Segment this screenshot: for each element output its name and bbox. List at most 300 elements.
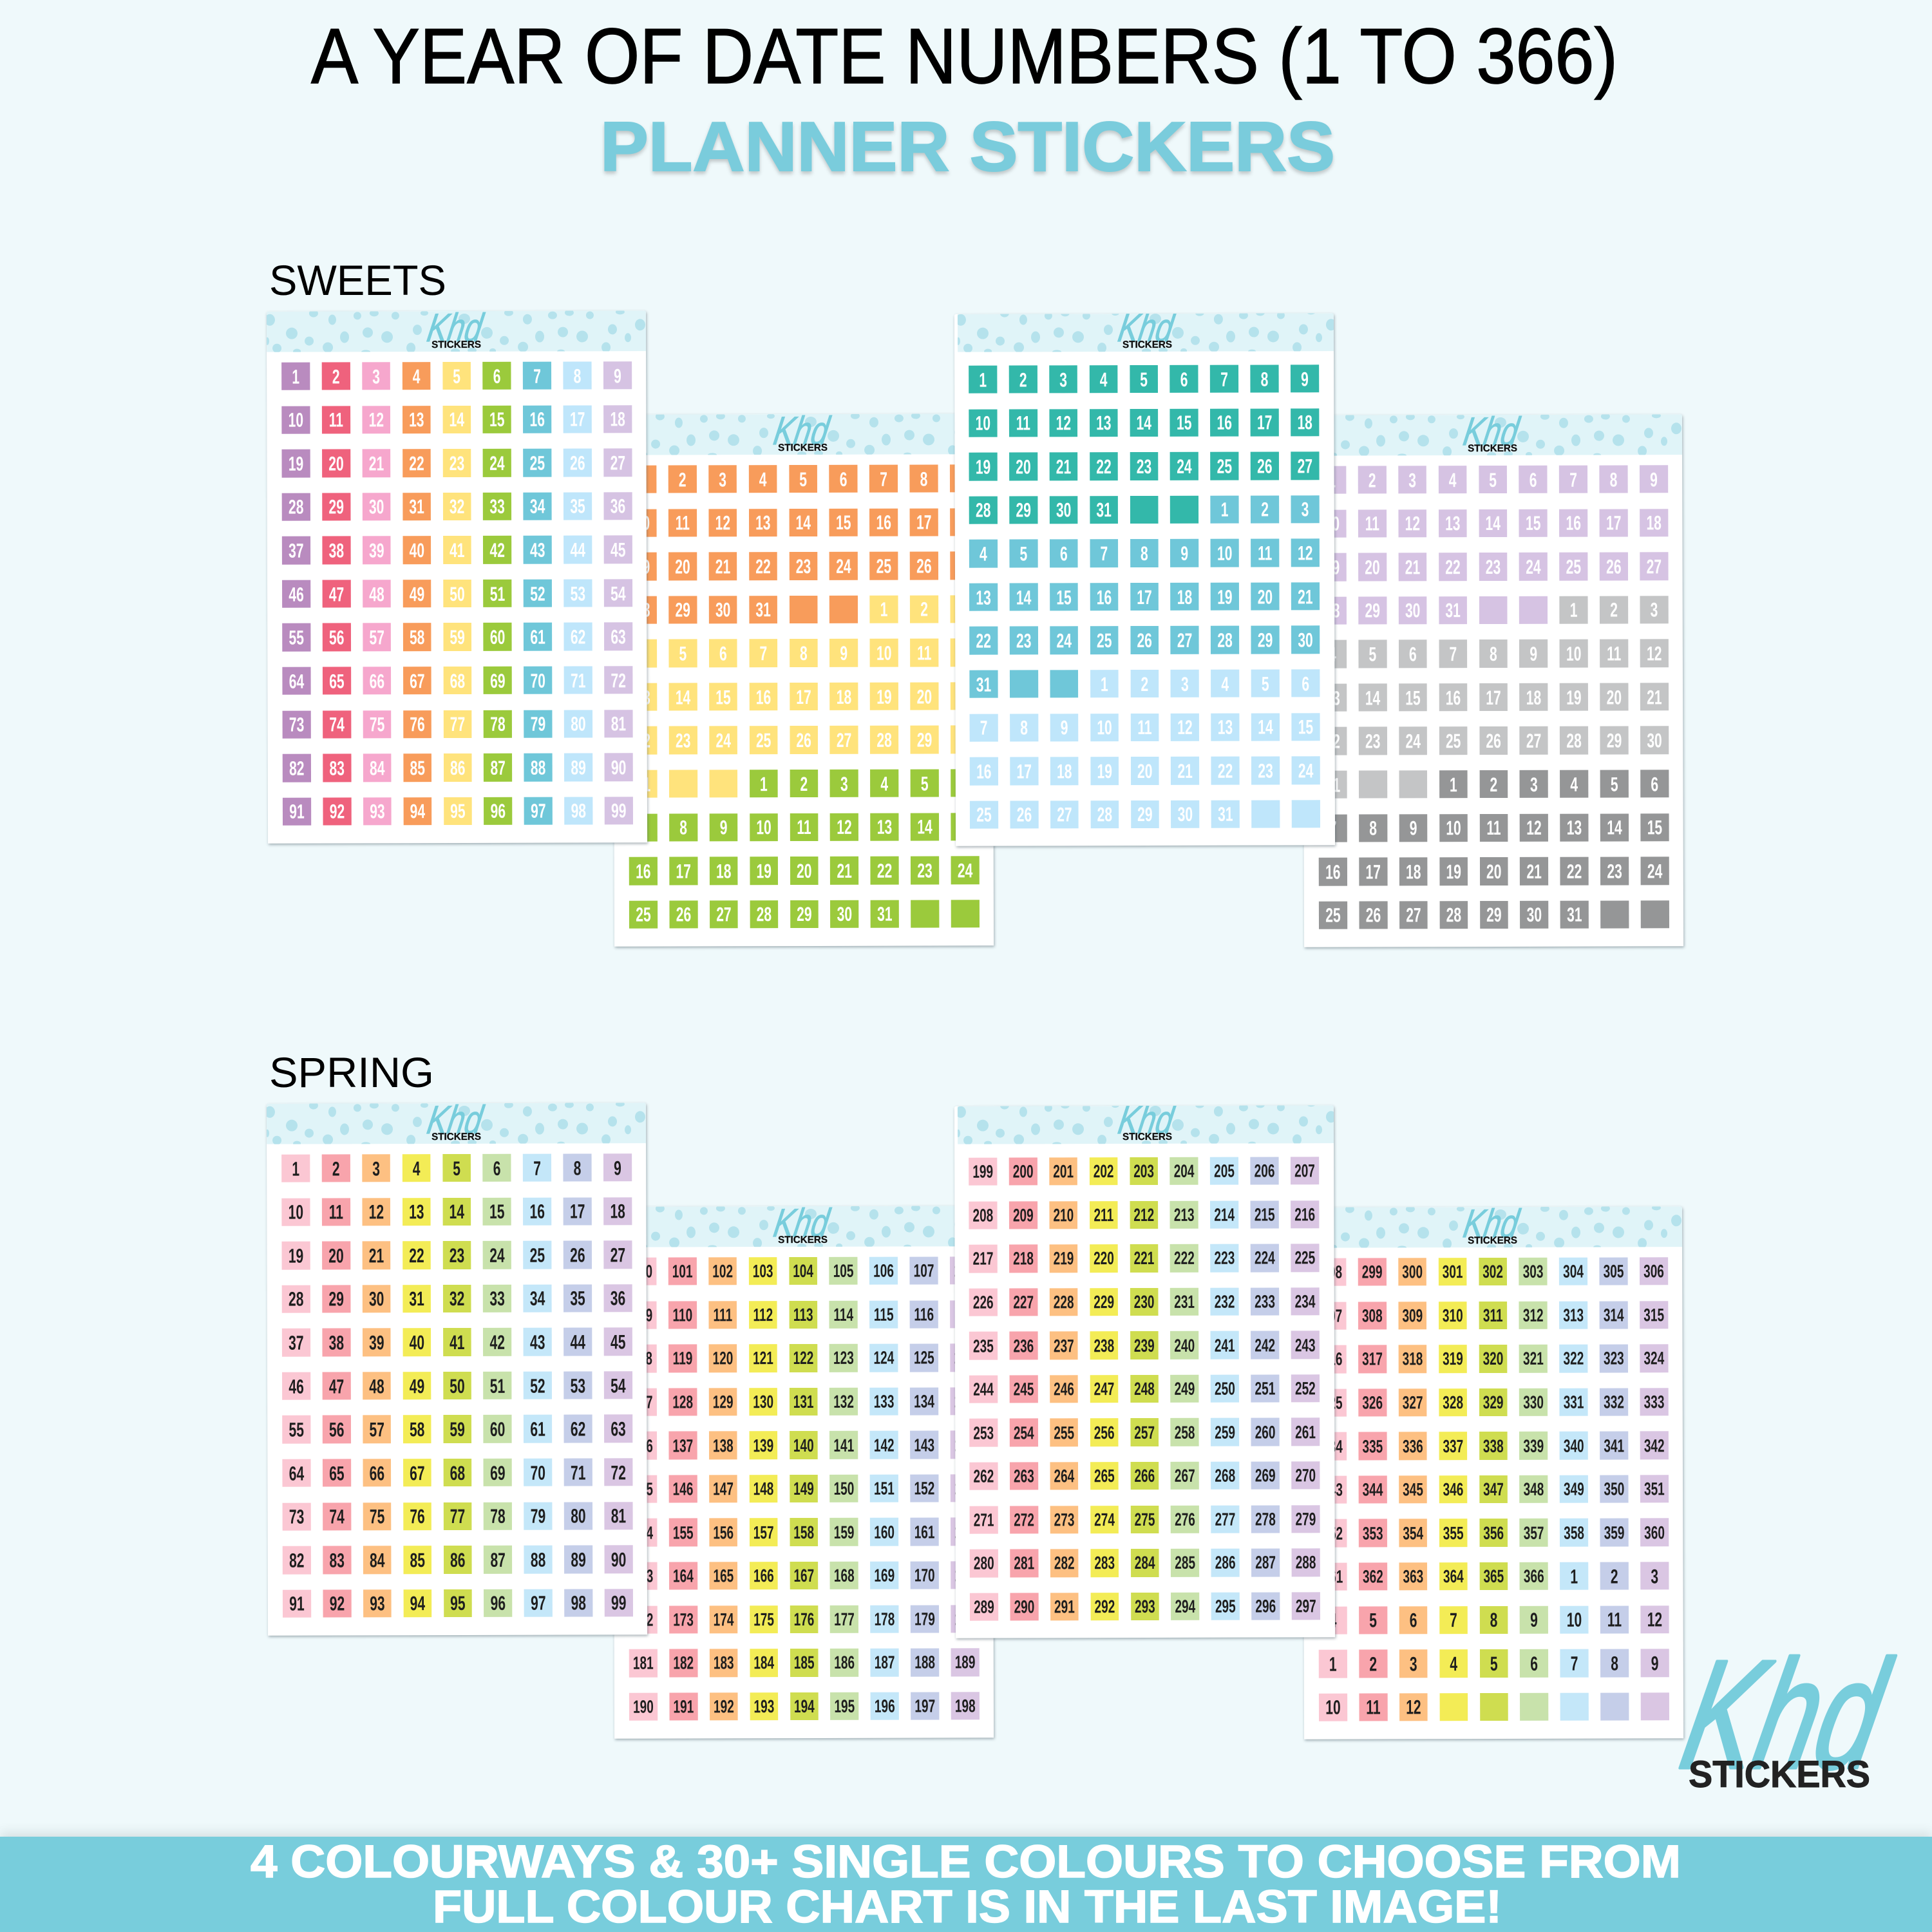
sticker grid: 258 <box>1175 1422 1195 1443</box>
sticker grid: 22 <box>409 452 424 475</box>
sticker grid: 190 <box>633 1697 654 1717</box>
sticker grid: 39 <box>369 1331 384 1354</box>
sticker grid: 13 <box>409 408 424 431</box>
sticker grid: 65 <box>329 670 345 692</box>
sticker grid: 56 <box>329 1419 344 1441</box>
banner text: FULL COLOUR CHART IS IN THE LAST IMAGE! <box>433 1882 1502 1932</box>
sticker grid: 212 <box>1133 1205 1154 1225</box>
sticker grid: 284 <box>1135 1553 1155 1573</box>
sticker grid: 345 <box>1403 1479 1423 1499</box>
sticker grid: 1 <box>760 773 768 795</box>
sticker sheet: spring 199 to 297 <box>954 1105 1335 1638</box>
sticker grid: 199 <box>972 1162 993 1182</box>
sticker grid: 23 <box>1486 556 1501 578</box>
sticker grid: 128 <box>672 1392 693 1412</box>
sticker grid: 332 <box>1604 1392 1624 1412</box>
sticker grid: 6 <box>493 365 500 388</box>
sticker grid: 24 <box>489 452 505 475</box>
sticker grid: 25 <box>1566 555 1581 578</box>
sticker grid: 3 <box>372 1157 380 1180</box>
sticker grid: 49 <box>410 1375 424 1397</box>
sticker grid: 13 <box>1567 817 1582 839</box>
sticker grid: 29 <box>1137 803 1153 826</box>
sticker grid: 20 <box>1016 455 1031 478</box>
sticker grid: 3 <box>961 598 968 621</box>
sticker grid: 223 <box>1214 1248 1235 1268</box>
sticker grid: 36 <box>611 495 625 518</box>
sticker grid: 4 <box>1450 1653 1457 1675</box>
sticker grid: 15 <box>1056 586 1072 609</box>
sticker grid: 88 <box>531 757 545 779</box>
sticker grid: 52 <box>530 582 545 605</box>
sticker grid: 12 <box>1647 642 1662 665</box>
sticker grid: 14 <box>917 816 933 838</box>
sticker grid: 13 <box>635 686 650 708</box>
sticker grid: 15 <box>1647 817 1662 839</box>
sticker grid: 25 <box>636 904 651 926</box>
sticker grid: 23 <box>917 859 933 882</box>
sticker grid: 31 <box>1218 803 1233 826</box>
sticker grid: 24 <box>489 1244 505 1267</box>
sticker grid: 11 <box>1366 1696 1381 1719</box>
sheet header with dots and logo: STICKERS <box>431 1132 481 1142</box>
sticker grid: 56 <box>329 627 344 649</box>
sticker grid: 366 <box>1524 1566 1544 1586</box>
sticker grid: 21 <box>957 685 972 708</box>
sticker grid <box>969 365 1320 829</box>
sticker grid: 3 <box>1302 498 1309 521</box>
sticker grid: 37 <box>289 540 304 562</box>
sticker grid: 13 <box>409 1200 424 1223</box>
sticker grid: 26 <box>570 1244 585 1266</box>
sticker grid: 329 <box>1483 1392 1504 1412</box>
sticker grid: 10 <box>1097 716 1112 739</box>
sticker grid: 9 <box>1301 368 1309 390</box>
sticker grid: 2 <box>920 598 928 621</box>
sticker grid: 281 <box>1014 1553 1034 1573</box>
sticker grid: 44 <box>570 1331 585 1354</box>
sticker grid: 13 <box>1218 716 1233 739</box>
sticker grid: 184 <box>753 1653 774 1673</box>
sticker grid: 26 <box>1257 455 1273 477</box>
sticker grid: 18 <box>1057 760 1072 782</box>
sticker grid: 46 <box>289 583 304 605</box>
sticker grid: 16 <box>529 408 545 431</box>
sticker grid: 17 <box>1257 412 1272 434</box>
sticker grid: 156 <box>713 1522 734 1542</box>
sticker grid: 301 <box>1443 1262 1463 1282</box>
sticker grid: 179 <box>914 1609 935 1629</box>
sticker grid: 11 <box>1486 817 1501 839</box>
sticker sheet: spring 1 to 99 <box>267 1103 647 1636</box>
sticker grid: 362 <box>1363 1567 1383 1587</box>
sticker grid: 21 <box>1177 760 1193 782</box>
sticker grid: 116 <box>914 1304 934 1324</box>
sticker grid: 349 <box>1564 1479 1584 1499</box>
sticker grid: 14 <box>795 511 811 534</box>
sticker grid: 8 <box>1610 468 1617 491</box>
sticker grid: 2 <box>1490 773 1497 796</box>
sticker grid: 72 <box>611 1461 626 1484</box>
sticker grid: 18 <box>1297 412 1312 434</box>
sticker grid: 82 <box>289 1549 305 1572</box>
sticker grid: 81 <box>611 1505 626 1528</box>
sticker grid: 322 <box>1563 1349 1584 1368</box>
sticker grid: 296 <box>1255 1596 1276 1616</box>
sticker grid: 256 <box>1094 1423 1115 1443</box>
sticker grid: 11 <box>329 1201 343 1224</box>
sticker grid: 307 <box>1321 1305 1342 1325</box>
sticker grid: 11 <box>676 512 690 535</box>
sticker grid: 13 <box>755 511 771 534</box>
sticker grid: 57 <box>369 1418 384 1441</box>
sticker grid: 9 <box>1530 1609 1538 1631</box>
sticker grid: 196 <box>875 1696 895 1716</box>
sticker grid: 155 <box>673 1522 694 1542</box>
sticker grid: 55 <box>289 1419 304 1441</box>
sticker grid: 226 <box>973 1293 994 1312</box>
sticker grid: 28 <box>1566 730 1582 752</box>
sticker grid: 80 <box>571 713 586 735</box>
banner: colourways callout <box>0 1837 1932 1932</box>
sticker grid: 12 <box>837 816 852 838</box>
sticker grid: 14 <box>1258 716 1273 739</box>
sticker grid: 30 <box>1056 499 1071 522</box>
sticker grid: 218 <box>1013 1249 1034 1269</box>
sticker grid: 31 <box>976 673 991 696</box>
sticker grid: 4 <box>413 365 421 388</box>
sticker grid: 10 <box>976 412 990 435</box>
sheet header with dots and logo: STICKERS <box>1468 443 1517 454</box>
sticker grid: 25 <box>1446 730 1461 752</box>
sticker grid: 47 <box>329 583 344 605</box>
sticker grid: 21 <box>1526 860 1542 883</box>
sticker grid: 71 <box>571 1461 586 1484</box>
sticker grid: 2 <box>1369 1653 1377 1675</box>
sticker grid: 30 <box>957 728 972 752</box>
sticker grid: 315 <box>1643 1305 1664 1325</box>
sticker grid: 205 <box>1214 1161 1235 1181</box>
sticker grid: 142 <box>874 1435 895 1455</box>
sticker grid: 181 <box>633 1653 654 1673</box>
sticker grid: 27 <box>1647 555 1662 578</box>
sticker grid: 111 <box>713 1305 732 1325</box>
sticker grid: 123 <box>833 1348 854 1368</box>
sticker grid: 251 <box>1255 1379 1275 1399</box>
sticker grid: 93 <box>370 1593 385 1615</box>
sticker grid: 357 <box>1524 1522 1544 1543</box>
sticker grid: 344 <box>1363 1480 1383 1500</box>
sticker grid: 92 <box>330 1593 345 1615</box>
sticker grid: 40 <box>410 539 424 562</box>
sticker grid: 259 <box>1215 1422 1235 1442</box>
sticker grid: 20 <box>1365 556 1380 578</box>
sticker grid: 287 <box>1255 1553 1276 1573</box>
sticker grid: 9 <box>720 817 727 839</box>
sticker grid: 94 <box>410 1593 425 1615</box>
sticker grid: 90 <box>611 756 626 779</box>
sticker grid: 317 <box>1362 1349 1383 1369</box>
sticker grid: 20 <box>675 555 690 578</box>
sticker grid: 107 <box>914 1261 934 1281</box>
sticker grid: 11 <box>1607 1609 1622 1631</box>
sticker grid: 25 <box>1097 629 1112 652</box>
sticker grid: 108 <box>954 1260 974 1281</box>
sticker grid: 2 <box>800 773 808 795</box>
sticker grid: 24 <box>1526 556 1541 578</box>
sticker grid: 75 <box>370 714 384 736</box>
sheet header with dots and logo: STICKERS <box>1122 339 1172 350</box>
sticker grid <box>629 1256 980 1721</box>
sticker grid: 5 <box>1490 1653 1498 1675</box>
sticker grid: 224 <box>1255 1248 1275 1268</box>
sticker grid: 4 <box>413 1157 421 1180</box>
sticker grid: 30 <box>1527 904 1542 926</box>
sticker grid: 48 <box>369 1375 384 1397</box>
sticker grid: 28 <box>757 904 772 926</box>
sticker grid: 265 <box>1094 1466 1115 1486</box>
sticker grid: 7 <box>1329 817 1337 840</box>
sticker grid: 32 <box>450 495 464 518</box>
sticker grid: 217 <box>973 1249 993 1269</box>
sticker grid: 302 <box>1482 1262 1503 1282</box>
sticker grid: 76 <box>410 1505 425 1528</box>
sticker grid: 5 <box>1019 542 1027 565</box>
sticker grid: 27 <box>1057 804 1072 826</box>
logo: Khd Stickers: STICKERS <box>1689 1754 1870 1795</box>
sticker grid: 30 <box>715 599 730 621</box>
sticker grid: 130 <box>753 1392 773 1412</box>
sticker grid: 240 <box>1174 1335 1195 1355</box>
sticker grid: 3 <box>1651 1565 1658 1587</box>
sticker grid: 159 <box>834 1522 855 1542</box>
sticker grid: 99 <box>611 800 627 822</box>
sticker grid: 194 <box>794 1696 815 1716</box>
sticker grid: 86 <box>450 757 465 779</box>
sticker grid: 140 <box>793 1435 814 1455</box>
sticker grid: 62 <box>571 1418 585 1441</box>
sticker grid: 260 <box>1255 1422 1275 1442</box>
sticker grid: 250 <box>1215 1379 1235 1399</box>
sticker grid: 187 <box>875 1653 895 1672</box>
sticker grid: 227 <box>1013 1292 1034 1312</box>
sticker grid: 7 <box>1220 368 1228 390</box>
sticker grid: 300 <box>1402 1262 1423 1282</box>
sticker grid: 98 <box>571 800 586 822</box>
sticker grid: 58 <box>410 626 424 649</box>
sticker grid: 97 <box>531 1592 546 1615</box>
sticker grid: 278 <box>1255 1509 1276 1529</box>
sticker grid: 209 <box>1013 1205 1034 1225</box>
sticker grid: 1 <box>1328 469 1336 491</box>
sticker grid: 31 <box>1567 904 1582 926</box>
sticker grid: 25 <box>1217 455 1232 478</box>
sticker grid: 171 <box>954 1566 975 1586</box>
sticker grid: 211 <box>1094 1205 1113 1225</box>
sticker grid: 31 <box>636 773 650 795</box>
sticker grid: 148 <box>753 1479 773 1499</box>
sticker grid: 219 <box>1054 1249 1074 1269</box>
sticker grid: 154 <box>632 1522 653 1542</box>
sticker grid: 200 <box>1013 1162 1034 1182</box>
sticker grid: 42 <box>489 1331 505 1354</box>
sticker grid: 189 <box>955 1653 975 1672</box>
sticker grid: 286 <box>1215 1553 1236 1573</box>
sticker grid: 177 <box>834 1609 855 1629</box>
sticker grid: 45 <box>611 1331 625 1353</box>
sticker grid: 132 <box>833 1392 854 1412</box>
sticker grid: 264 <box>1054 1466 1074 1486</box>
sticker grid: 5 <box>1611 773 1618 795</box>
sticker grid: 11 <box>1607 642 1621 665</box>
sticker grid: 266 <box>1134 1466 1155 1486</box>
sticker grid: 112 <box>753 1305 773 1325</box>
sticker grid: 100 <box>632 1262 652 1282</box>
sticker grid: 26 <box>1017 804 1032 826</box>
sticker grid: 280 <box>974 1553 994 1573</box>
sticker grid: 214 <box>1214 1204 1235 1224</box>
sticker grid: 360 <box>1644 1522 1665 1542</box>
sticker grid: 7 <box>880 468 887 490</box>
sticker grid: 203 <box>1133 1161 1154 1181</box>
sticker grid: 17 <box>1016 760 1032 782</box>
sticker grid: 174 <box>714 1609 734 1629</box>
sticker grid: 1 <box>1450 773 1457 796</box>
sticker grid: 72 <box>611 669 626 692</box>
sticker grid: 19 <box>1325 556 1340 579</box>
sticker grid: 336 <box>1403 1436 1423 1456</box>
sticker grid: 150 <box>834 1479 854 1499</box>
sticker grid: 12 <box>1298 542 1312 564</box>
sheet header with dots and logo <box>267 310 646 352</box>
sticker grid: 267 <box>1175 1466 1195 1486</box>
sticker grid: 9 <box>1651 1652 1658 1674</box>
sticker grid: 12 <box>1406 1696 1421 1719</box>
sticker grid: 120 <box>713 1349 733 1368</box>
sticker sheet: sweets orange yellow green <box>613 413 994 947</box>
sticker grid: 13 <box>976 586 991 609</box>
sticker grid: 331 <box>1564 1392 1584 1412</box>
sticker grid: 252 <box>1295 1378 1316 1398</box>
sticker grid: 14 <box>1485 512 1501 535</box>
sticker grid: 311 <box>1483 1305 1503 1325</box>
sticker grid: 237 <box>1054 1336 1074 1356</box>
sticker grid: 34 <box>530 1287 545 1310</box>
sticker grid: 241 <box>1215 1335 1235 1355</box>
sticker grid: 18 <box>716 860 731 882</box>
sticker grid: 84 <box>370 1549 384 1571</box>
sticker grid: 16 <box>636 860 651 883</box>
sticker grid: 21 <box>369 1244 384 1267</box>
sticker grid: 22 <box>1445 556 1461 578</box>
sticker grid: 243 <box>1295 1335 1316 1355</box>
sticker grid: 4 <box>639 643 647 665</box>
sticker grid: 17 <box>676 860 691 882</box>
sticker grid: 59 <box>450 1418 465 1441</box>
sticker grid: 88 <box>531 1549 545 1571</box>
sticker grid: 20 <box>1137 760 1152 782</box>
sticker grid: 9 <box>1650 468 1658 491</box>
sticker grid: 3 <box>1410 1653 1417 1675</box>
sticker grid: 11 <box>797 816 811 838</box>
sticker grid: 33 <box>489 495 505 518</box>
sticker grid: 12 <box>1647 1609 1662 1631</box>
sticker grid: 19 <box>1217 585 1233 608</box>
sticker grid: 15 <box>958 816 972 838</box>
sticker grid: 12 <box>715 512 730 535</box>
sticker grid: 77 <box>450 1505 465 1528</box>
sticker grid: 2 <box>1261 498 1269 521</box>
sticker grid: 95 <box>450 1592 466 1615</box>
sticker grid: 16 <box>876 511 891 534</box>
sticker grid: 232 <box>1215 1292 1235 1312</box>
sticker grid: 93 <box>370 800 385 823</box>
sticker grid: 24 <box>1298 759 1313 782</box>
sticker grid: 170 <box>914 1566 935 1586</box>
sticker grid: 193 <box>753 1696 774 1716</box>
sheet header with dots and logo <box>957 1105 1334 1144</box>
sticker grid: 244 <box>973 1379 994 1399</box>
sticker grid: 63 <box>611 1417 626 1441</box>
sticker grid: 87 <box>490 757 506 779</box>
sticker grid: 352 <box>1322 1523 1343 1543</box>
sticker grid: 139 <box>753 1435 773 1455</box>
sticker grid: 30 <box>369 496 384 518</box>
sticker grid: 3 <box>1059 368 1067 391</box>
sticker grid: 20 <box>1607 686 1622 708</box>
sticker grid: 318 <box>1403 1349 1423 1369</box>
sticker grid: 22 <box>635 730 650 752</box>
sticker grid: 16 <box>1446 687 1461 709</box>
sticker sheet: sweets lavender silver grey <box>1303 414 1683 947</box>
sticker grid: 26 <box>1486 730 1501 752</box>
sticker grid: 164 <box>673 1566 694 1586</box>
sticker grid: 48 <box>369 583 384 605</box>
sticker grid: 330 <box>1523 1392 1544 1412</box>
sticker grid: 24 <box>1056 629 1072 652</box>
sticker grid: 23 <box>1607 860 1622 882</box>
sticker grid: 60 <box>490 626 505 649</box>
sticker grid: 31 <box>755 599 771 621</box>
sticker grid: 9 <box>1061 717 1068 739</box>
sticker grid: 2 <box>1611 1565 1618 1587</box>
sticker grid: 16 <box>1566 512 1581 535</box>
sticker grid: 10 <box>1566 643 1582 665</box>
sticker grid: 26 <box>1137 629 1152 652</box>
sticker grid: 262 <box>973 1466 994 1486</box>
sticker grid: 5 <box>1369 1609 1377 1632</box>
sticker grid: 62 <box>571 626 585 649</box>
sticker grid: 185 <box>794 1653 815 1672</box>
sticker grid: 43 <box>530 1331 545 1354</box>
sticker grid: 73 <box>289 1506 304 1528</box>
sticker grid: 29 <box>1258 629 1273 652</box>
sticker grid: 182 <box>673 1653 694 1673</box>
sticker grid: 9 <box>614 365 621 387</box>
sticker grid: 2 <box>679 468 687 491</box>
sticker grid: 225 <box>1294 1248 1315 1268</box>
sticker grid: 12 <box>1177 716 1193 739</box>
sticker grid: 9 <box>840 642 848 665</box>
sticker grid: 19 <box>876 685 892 708</box>
sticker grid: 6 <box>719 642 727 665</box>
sticker grid: 5 <box>921 772 929 795</box>
sticker grid <box>1319 465 1669 929</box>
sticker grid: 289 <box>974 1597 994 1617</box>
sticker grid: 4 <box>1570 773 1578 795</box>
sticker grid: 23 <box>676 730 690 752</box>
sticker grid: 351 <box>1644 1479 1665 1499</box>
